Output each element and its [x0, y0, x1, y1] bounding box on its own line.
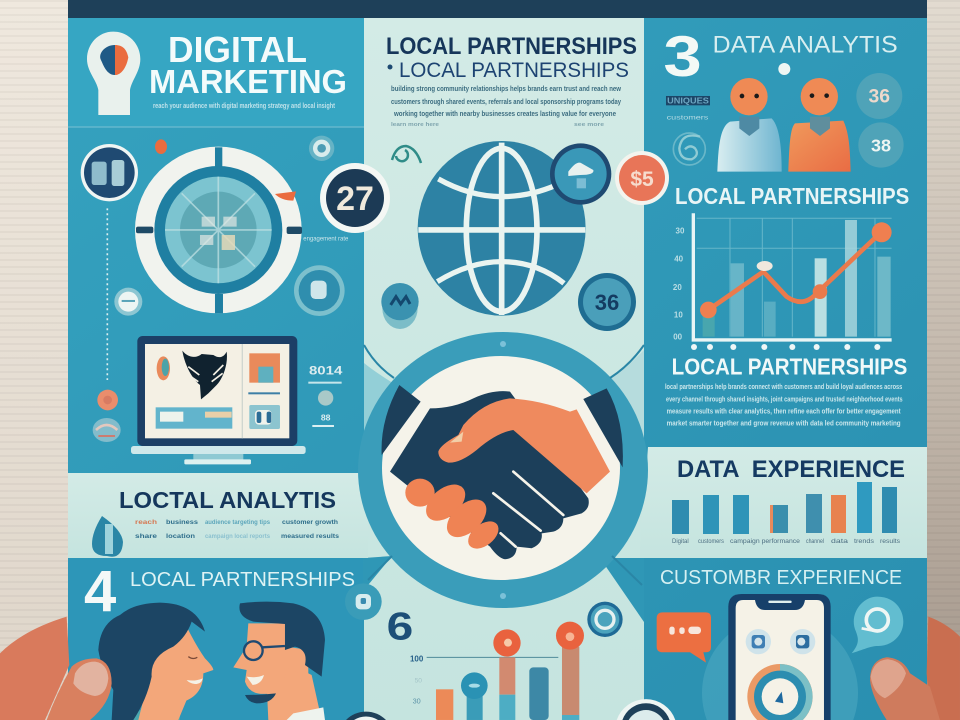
icon: teardrop	[92, 516, 123, 557]
text: table rows: campaign local reports	[205, 533, 270, 540]
heading: local partnerships: LOCAL PARTNERSHIPS	[675, 183, 909, 209]
hand: right hand holding poster	[870, 617, 960, 720]
icon: stat circle top: 36	[869, 87, 890, 108]
illustration: man	[233, 602, 325, 720]
icon: ring badge bottom	[294, 265, 345, 316]
panel: digital marketing header	[68, 18, 364, 128]
label: visitors: customers	[667, 114, 709, 121]
badge: 27	[320, 163, 390, 233]
icon: clipped badge bottom left	[346, 712, 386, 720]
panel: local partnerships center column	[364, 18, 644, 720]
text: bar labels: results	[880, 539, 900, 545]
corner connectors	[364, 345, 644, 585]
heading: digital marketing: MARKETING	[149, 63, 347, 100]
icon: orange speech bubble	[657, 612, 711, 663]
heading: digital marketing	[149, 29, 347, 100]
pillar chart: 50	[415, 678, 422, 685]
ring	[358, 332, 648, 608]
heading: data experience: DATA EXPERIENCE	[677, 456, 905, 483]
icon: globe badge top right	[550, 143, 611, 205]
handshake circle	[358, 332, 648, 608]
text: table rows: location	[166, 533, 195, 540]
text: bar labels	[672, 539, 900, 545]
number 3: 3	[663, 25, 702, 89]
icon: stat circle bottom	[858, 122, 904, 168]
line chart: 00	[673, 332, 683, 341]
person: left figure	[717, 78, 782, 172]
panel: local partnerships bottom left	[68, 558, 363, 720]
text: table rows: audience targeting tips	[205, 519, 270, 526]
icon: circle badge right	[587, 602, 623, 637]
illustration: woman	[98, 603, 213, 720]
panel: left column target graphic	[81, 136, 349, 380]
text: donut label: engagement rate	[303, 236, 349, 243]
icon: number badge: 36	[595, 290, 619, 315]
panel: customer experience	[657, 567, 903, 720]
badge: orange	[615, 151, 669, 205]
text: body paragraph: building strong community relationships helps brands earn trust and reach new	[391, 84, 621, 93]
icon: clipped badge bottom right	[617, 699, 675, 720]
ring dots	[500, 341, 506, 599]
glow circle	[702, 615, 858, 720]
line chart: 30	[676, 226, 685, 235]
panel: data experience	[640, 447, 927, 558]
text: body paragraph: working together with nearby businesses creates lasting value for everyone	[393, 109, 616, 118]
icon: pale circle	[93, 418, 121, 442]
stat: right of laptop: 88	[321, 413, 331, 423]
shaded side wedges	[364, 350, 644, 622]
text: lower body paragraph: measure results with clear analytics, then refine each offer for better engagement	[667, 406, 901, 415]
icon: shield badge	[345, 583, 382, 620]
text: bar labels: data	[831, 539, 849, 545]
icon: pale badge	[114, 288, 142, 316]
icon: stat circle bottom: 38	[871, 136, 891, 156]
text: table rows: business	[166, 519, 198, 526]
number 6: 6	[387, 604, 413, 648]
text: body paragraph: customers through shared events, referrals and local sponsorship programs today	[391, 97, 622, 106]
heading: local partnerships lower: LOCAL PARTNERSHIPS	[672, 353, 907, 379]
panel: local analytics	[68, 473, 368, 558]
number 4: 4	[84, 559, 116, 624]
heading: digital marketing: DIGITAL	[168, 29, 307, 70]
icon: number badge	[578, 273, 636, 331]
donut chart	[135, 147, 302, 313]
heading: local partnerships: LOCAL PARTNERSHIPS	[130, 568, 355, 591]
stat: right of laptop: 8014	[309, 363, 343, 377]
globe	[418, 141, 586, 316]
icon: small badge top	[309, 136, 334, 161]
icon: navy badge	[81, 144, 138, 201]
text: body paragraph	[391, 84, 622, 128]
person: right figure	[788, 78, 851, 172]
line chart: 40	[674, 254, 684, 263]
panel: data analytics right column	[663, 25, 909, 428]
line chart	[673, 213, 892, 350]
text: table rows: customer growth	[282, 519, 338, 526]
text: table rows	[135, 519, 339, 540]
line chart: 20	[673, 283, 682, 292]
icon: light bulb	[87, 32, 140, 115]
heading: local partnerships: LOCAL PARTNERSHIPS	[386, 33, 637, 60]
icon: teal coin	[381, 283, 419, 329]
heading: loctal analytis: LOCTAL ANALYTIS	[119, 487, 336, 513]
pillar chart	[410, 622, 584, 720]
icon: pale dot	[778, 63, 790, 75]
text: bar labels: channel	[806, 539, 824, 545]
text: body paragraph: see more	[574, 122, 604, 128]
icon: link arc	[392, 146, 421, 163]
text: header caption: reach your audience with digital marketing strategy and local insight	[153, 101, 335, 110]
icon: handshake	[382, 385, 623, 559]
icon: laptop	[131, 336, 306, 464]
text: lower body paragraph	[665, 382, 903, 428]
text: table rows: share	[135, 533, 157, 540]
text: body paragraph: learn more here	[391, 122, 439, 128]
bar chart	[672, 482, 897, 534]
bottom center content	[345, 583, 623, 720]
icon: stat circle top	[856, 73, 902, 119]
icon: teal speech bubble	[852, 597, 903, 653]
text: bar labels: customers	[698, 539, 724, 545]
heading: data analytis: DATA ANALYTIS	[713, 32, 898, 59]
text: bar labels: campaign performance	[730, 539, 801, 545]
icon: spiral badge	[673, 133, 705, 165]
dotted connector	[105, 208, 110, 380]
badge: orange: $5	[630, 168, 654, 191]
hand: left hand holding poster	[0, 617, 112, 720]
panel: laptop section	[93, 336, 343, 464]
badge: 27: 27	[336, 180, 374, 218]
text: bar labels: trends	[854, 539, 874, 545]
icon: smartphone	[728, 594, 831, 720]
text: table rows: reach	[135, 519, 157, 526]
text: bar labels: Digital	[672, 539, 689, 545]
pillar chart: 30	[413, 696, 421, 705]
line chart: 10	[674, 311, 683, 320]
heading: customer experience: CUSTOMBR EXPERIENCE	[660, 567, 902, 589]
text: lower body paragraph: market smarter together and grow revenue with data led community marketing	[667, 419, 901, 428]
text: table rows: measured results	[281, 533, 339, 540]
subheading: local partnerships: LOCAL PARTNERSHIPS	[399, 59, 629, 82]
ring inner	[382, 356, 620, 580]
icon: orange circle	[97, 390, 118, 410]
icon: orange dot	[155, 139, 167, 154]
stat: right of laptop	[308, 363, 343, 427]
label: unique: UNIQUES	[667, 96, 709, 106]
pillar chart: 100	[410, 654, 424, 663]
